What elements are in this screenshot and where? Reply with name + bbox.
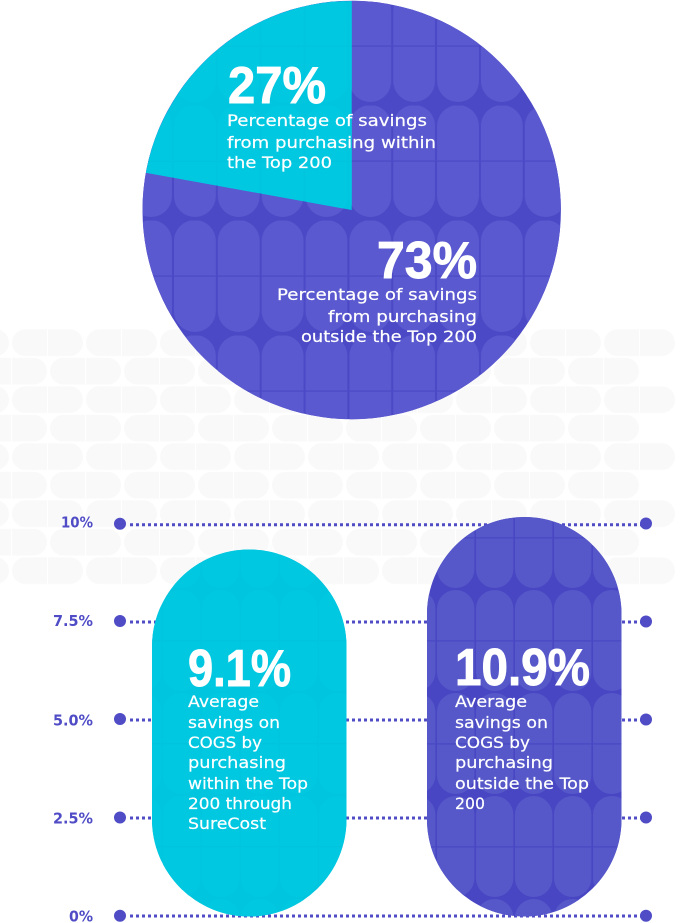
bar description: within Top 200: SureCost	[188, 814, 266, 833]
bar value: 10.9 percent: 10.9%	[455, 639, 590, 697]
bar description: outside Top 200: purchasing	[455, 753, 553, 772]
axis labels: 5.0%	[53, 712, 93, 730]
pie label: 27 percent: Percentage of savings	[227, 111, 427, 130]
pie label: 27 percent: from purchasing within	[227, 133, 436, 152]
bar description: outside Top 200: 200	[455, 794, 485, 813]
pie label: 27 percent: 27%	[228, 57, 326, 115]
bar description: outside Top 200: COGS by	[455, 733, 530, 752]
pie label: 73 percent: Percentage of savings	[277, 285, 477, 304]
bar description: within Top 200	[188, 692, 308, 833]
bar description: within Top 200: COGS by	[188, 733, 262, 752]
bar description: within Top 200: 200 through	[188, 794, 292, 813]
bar description: outside Top 200: outside the Top	[455, 774, 589, 793]
bar description: within Top 200: within the Top	[188, 774, 308, 793]
bar description: outside Top 200: Average	[455, 692, 527, 711]
pie label: 27 percent: the Top 200	[227, 153, 332, 172]
pie label: 73 percent: 73%	[377, 232, 477, 290]
axis labels: 7.5%	[53, 612, 93, 630]
pie label: 73 percent: outside the Top 200	[301, 327, 477, 346]
axis labels	[53, 514, 93, 923]
pie chart	[140, 0, 561, 419]
bar: 9.1 percent	[152, 550, 346, 916]
pie slice: 73 percent	[143, 1, 561, 419]
axis labels: 10%	[61, 514, 93, 532]
bar description: outside Top 200	[455, 692, 589, 813]
background pill pattern	[0, 329, 675, 586]
pie label: 73 percent	[277, 232, 477, 346]
bar description: within Top 200: Average	[188, 692, 259, 711]
pie label: 73 percent: from purchasing	[328, 307, 477, 326]
pie slice: 27 percent	[140, 0, 354, 212]
chart gridlines	[114, 518, 652, 922]
bar description: within Top 200: savings on	[188, 713, 280, 732]
bar: 10.9 percent	[427, 517, 622, 916]
bar description: outside Top 200: savings on	[455, 713, 548, 732]
axis labels: 2.5%	[53, 810, 93, 828]
pie label: 27 percent	[227, 57, 436, 172]
bar description: within Top 200: purchasing	[188, 753, 286, 772]
bar value: 9.1 percent: 9.1%	[188, 640, 291, 698]
